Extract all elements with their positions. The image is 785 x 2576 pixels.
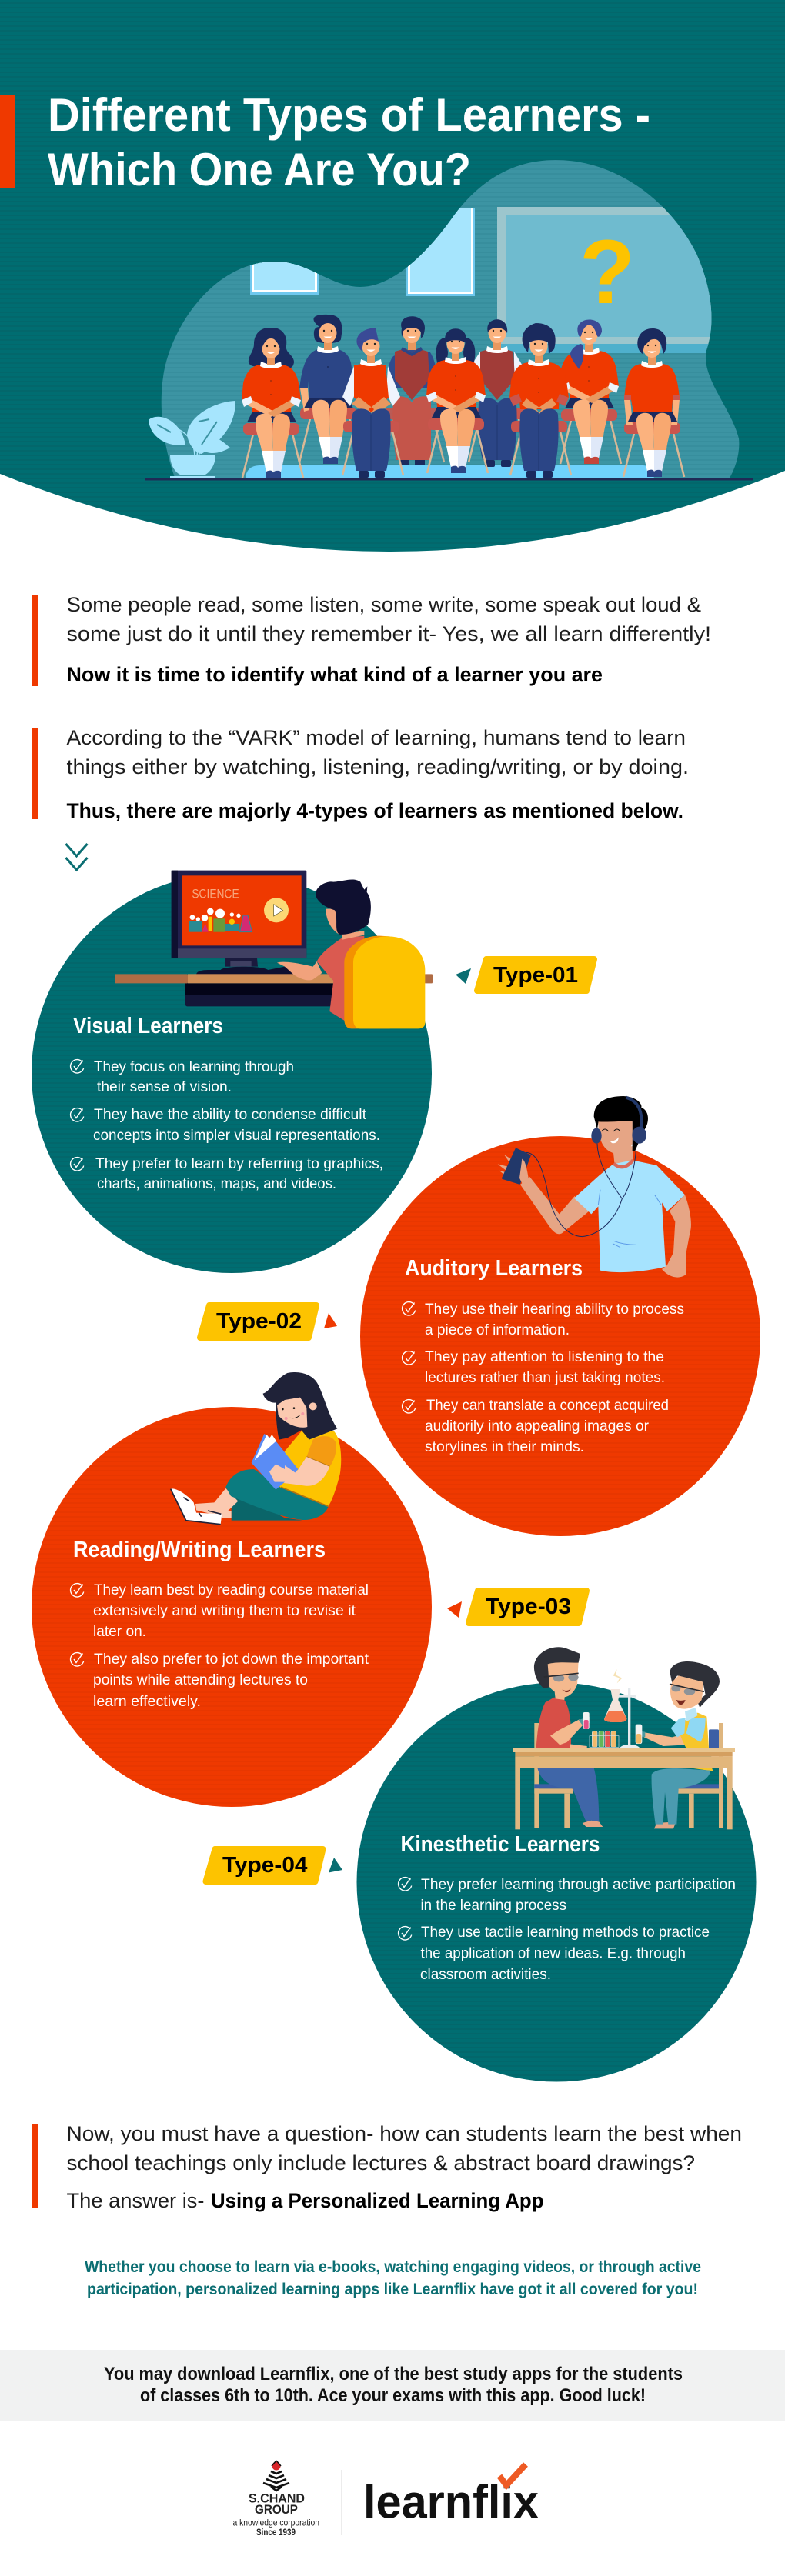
bullet list: their sense of vision. — [97, 1078, 232, 1095]
bullet list — [403, 1301, 684, 1455]
panel: auditory learners — [360, 1096, 760, 1536]
download band — [0, 2350, 785, 2421]
tag: Type-03 — [447, 1591, 586, 1623]
bullet list: They can translate a concept acquired — [426, 1397, 669, 1414]
tag: Type-01 — [456, 959, 594, 991]
floor line — [145, 478, 753, 480]
panel: kinesthetic learners — [357, 1647, 756, 2081]
bullet list: a piece of information. — [425, 1321, 570, 1338]
title — [48, 89, 650, 195]
windows and board — [250, 207, 721, 353]
tag: Type-02 — [200, 1305, 337, 1338]
student 5 — [426, 328, 488, 473]
closing accent bar — [32, 2124, 38, 2208]
intro block 2: Thus, there are majorly 4-types of learners as mentioned below. — [66, 799, 683, 822]
bullet list: classroom activities. — [420, 1966, 551, 1983]
intro block 1 — [32, 593, 711, 686]
closing question block: school teachings only include lectures & abstract board drawings? — [66, 2151, 695, 2174]
bullet list: They prefer learning through active participation — [421, 1876, 736, 1893]
classroom illustration — [145, 160, 753, 480]
tag: Type-03: Type-03 — [486, 1595, 571, 1619]
title: Different Types of Learners - — [48, 89, 650, 141]
title accent bar — [0, 95, 15, 188]
illustration: student with headphones — [498, 1096, 691, 1278]
closing question block: The answer is- — [66, 2189, 205, 2212]
bullet list: They focus on learning through — [94, 1058, 294, 1075]
teal statement: Whether you choose to learn via e-books, watching engaging videos, or through active — [85, 2258, 701, 2276]
circle background — [360, 1136, 760, 1536]
student 3 — [342, 328, 403, 478]
bullet list — [71, 1581, 369, 1710]
bullet list: auditorily into appealing images or — [425, 1418, 649, 1435]
tag: Type-02: Type-02 — [216, 1309, 302, 1334]
question mark: ? — [580, 222, 635, 323]
illustration: student at computer: SCIENCE — [192, 886, 239, 901]
bullet list: They use their hearing ability to process — [425, 1301, 684, 1318]
bullet list: They have the ability to condense difficult — [94, 1106, 367, 1123]
bullet list: They learn best by reading course material — [94, 1581, 369, 1598]
bullet list: They use tactile learning methods to practice — [421, 1924, 710, 1941]
tag: Type-04: Type-04 — [222, 1853, 308, 1878]
closing question block — [32, 2122, 742, 2212]
floor mat — [246, 465, 654, 479]
intro block 2: things either by watching, listening, reading/writing, or by doing. — [66, 755, 689, 778]
bullet list: They prefer to learn by referring to graphics, — [95, 1155, 383, 1172]
heading: Visual Learners — [73, 1014, 223, 1038]
closing question block: Using a Personalized Learning App — [211, 2189, 543, 2212]
VARK accent bar — [32, 728, 38, 819]
student 6 — [469, 319, 529, 467]
logo: S.Chand Group — [232, 2461, 319, 2538]
panel: reading/writing learners — [32, 1372, 432, 1807]
intro block 1: Some people read, some listen, some write, some speak out loud & — [66, 593, 701, 616]
intro block 2 — [32, 726, 689, 822]
student 8 — [560, 319, 621, 464]
bullet list — [71, 1058, 383, 1192]
heading: Auditory Learners — [405, 1256, 583, 1281]
logo: S.Chand Group: S.CHAND — [249, 2492, 305, 2506]
title: Which One Are You? — [48, 144, 471, 195]
heading: Kinesthetic Learners — [400, 1832, 600, 1857]
bullet list: concepts into simpler visual representations. — [93, 1127, 380, 1144]
student 1 — [242, 328, 303, 478]
panel: header background — [0, 0, 785, 552]
panel: visual learners — [32, 871, 433, 1273]
download band: You may download Learnflix, one of the best study apps for the students — [104, 2364, 683, 2384]
circle background — [32, 873, 432, 1273]
tag: Type-04 — [206, 1849, 342, 1881]
plant — [149, 401, 236, 479]
bullet list: the application of new ideas. E.g. through — [420, 1944, 686, 1961]
illustration: girl reading — [171, 1372, 341, 1525]
back row students — [299, 315, 621, 467]
bullet list: They also prefer to jot down the important — [94, 1651, 369, 1668]
bullet list: storylines in their minds. — [425, 1438, 584, 1455]
bullet list: later on. — [93, 1623, 146, 1640]
illustration: students in lab — [513, 1647, 735, 1829]
bullet list: learn effectively. — [93, 1693, 201, 1710]
icon: chevrons down — [66, 844, 88, 870]
logo: S.Chand Group: GROUP — [255, 2503, 298, 2517]
front row students — [242, 323, 684, 478]
intro block 1: Now it is time to identify what kind of a learner you are — [66, 663, 603, 686]
intro block 2: According to the “VARK” model of learning, humans tend to learn — [66, 726, 686, 749]
student 9 — [623, 328, 684, 477]
illustration: student at computer — [115, 871, 433, 1028]
bullet list: points while attending lectures to — [93, 1671, 308, 1688]
bullet list: lectures rather than just taking notes. — [425, 1369, 665, 1386]
student 4 — [383, 316, 444, 465]
bullet list: charts, animations, maps, and videos. — [97, 1175, 336, 1192]
student 2 — [299, 315, 360, 464]
intro block 1: some just do it until they remember it- Yes, we all learn differently! — [66, 622, 711, 645]
bullet list: extensively and writing them to revise it — [93, 1602, 356, 1619]
classroom wall blob — [162, 160, 739, 479]
tag: Type-01: Type-01 — [493, 963, 578, 988]
circle background — [32, 1407, 432, 1807]
bullet list — [399, 1876, 736, 1983]
student 7 — [509, 323, 571, 478]
teal statement — [85, 2258, 701, 2298]
closing question block: Now, you must have a question- how can students learn the best when — [66, 2122, 742, 2145]
circle background — [357, 1683, 756, 2081]
bullet list: in the learning process — [420, 1897, 566, 1914]
logo: S.Chand Group: Since 1939 — [256, 2528, 296, 2538]
logo: learnflix: learnflix — [363, 2475, 539, 2528]
download band: of classes 6th to 10th. Ace your exams with this app. Good luck! — [140, 2385, 646, 2406]
heading: Reading/Writing Learners — [73, 1538, 326, 1562]
logo: S.Chand Group: a knowledge corporation — [232, 2517, 319, 2528]
teal statement: participation, personalized learning apps like Learnflix have got it all covered for you! — [87, 2280, 698, 2298]
intro accent bar — [32, 595, 38, 686]
bullet list: They pay attention to listening to the — [425, 1348, 664, 1365]
